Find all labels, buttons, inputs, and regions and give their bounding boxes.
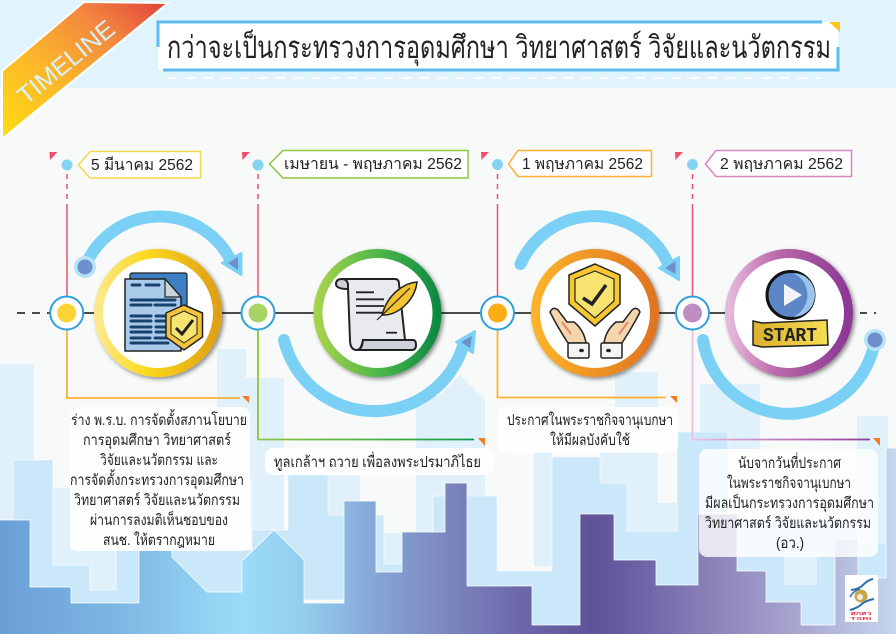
text panel 3: ให้มีผลบังคับใช้ bbox=[550, 431, 630, 449]
date label 4 bbox=[706, 150, 852, 176]
icon: shield and hands bbox=[536, 254, 654, 372]
arrow arc 4 bbox=[697, 329, 886, 414]
text panel 2: ทูลเกล้าฯ ถวาย เพื่อลงพระปรมาภิไธย bbox=[274, 451, 481, 471]
logo: TSRI bbox=[850, 616, 872, 621]
logo: สกสว bbox=[850, 611, 872, 617]
text panel 4: นับจากวันที่ประกาศ bbox=[738, 452, 841, 472]
text panel 1: สนช. ให้ตรากฎหมาย bbox=[103, 531, 215, 549]
lower connectors bbox=[67, 330, 870, 440]
arrow arc 2 bbox=[278, 331, 475, 411]
icon: play button and start banner: START bbox=[763, 325, 817, 347]
timeline nodes bbox=[50, 296, 709, 330]
icon: play button and start banner bbox=[730, 254, 848, 372]
logo bbox=[845, 575, 878, 622]
icon: scroll and feather bbox=[318, 254, 437, 372]
text panel 1: วิจัยและนวัตกรรม และ bbox=[100, 452, 218, 469]
date label 2 bbox=[270, 150, 468, 178]
arrow arc 1 bbox=[74, 217, 242, 278]
text panel 4 bbox=[699, 449, 878, 557]
text panel 3 bbox=[498, 407, 678, 453]
node centers bbox=[57, 304, 702, 322]
text panel 3: ประกาศในพระราชกิจจานุเบกษา bbox=[507, 411, 673, 430]
date label 2: เมษายน - พฤษภาคม 2562 bbox=[284, 156, 462, 173]
date label 3: 1 พฤษภาคม 2562 bbox=[522, 156, 643, 173]
date label 1 bbox=[78, 152, 200, 178]
title box bbox=[158, 22, 840, 78]
text panel 2 bbox=[265, 448, 494, 475]
ribbon: TIMELINE bbox=[2, 2, 168, 139]
text panel 4: ในพระราชกิจจานุเบกษา bbox=[727, 474, 851, 493]
red connectors and flags bbox=[50, 152, 698, 296]
text panel 1: การจัดตั้งกระทรวงการอุดมศึกษา bbox=[70, 469, 244, 490]
icon: document with shield bbox=[98, 254, 218, 372]
corner markers bbox=[242, 396, 880, 446]
text panel 1: ร่าง พ.ร.บ. การจัดตั้งสภานโยบาย bbox=[71, 409, 247, 429]
timeline axis bbox=[17, 312, 876, 314]
arrow arc 3 bbox=[514, 216, 679, 280]
foreground buildings bbox=[0, 448, 896, 634]
date label 4: 2 พฤษภาคม 2562 bbox=[720, 156, 843, 173]
skyline background bbox=[0, 349, 896, 634]
text panel 1: วิทยาศาสตร์ วิจัยและนวัตกรรม bbox=[74, 492, 240, 509]
text panel 4: (อว.) bbox=[776, 535, 804, 552]
date label 3 bbox=[508, 150, 652, 176]
text panel 1: ผ่านการลงมติเห็นชอบของ bbox=[90, 510, 228, 529]
ribbon: TIMELINE: TIMELINE bbox=[12, 15, 121, 110]
header band bbox=[0, 0, 896, 88]
text panel 1 bbox=[70, 407, 250, 551]
text panel 1: การอุดมศึกษา วิทยาศาสตร์ bbox=[83, 432, 231, 450]
date label 1: 5 มีนาคม 2562 bbox=[91, 156, 193, 174]
